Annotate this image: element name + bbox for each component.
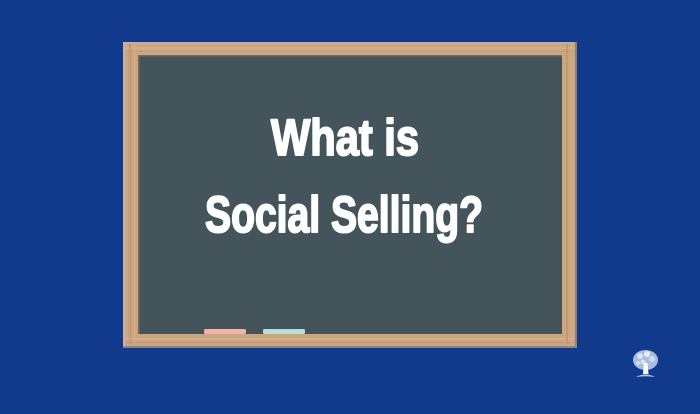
inner frame shadow bbox=[138, 55, 562, 334]
heading line 1: What is bbox=[271, 109, 419, 166]
heading line 2: Social Selling? bbox=[205, 186, 483, 243]
chalk: mint bbox=[263, 329, 305, 334]
slate writing surface bbox=[138, 55, 562, 334]
icon: tree logo bbox=[633, 350, 658, 377]
panel: chalkboard bbox=[123, 42, 577, 348]
chalk: pink bbox=[204, 329, 246, 334]
wooden frame bbox=[123, 42, 577, 348]
